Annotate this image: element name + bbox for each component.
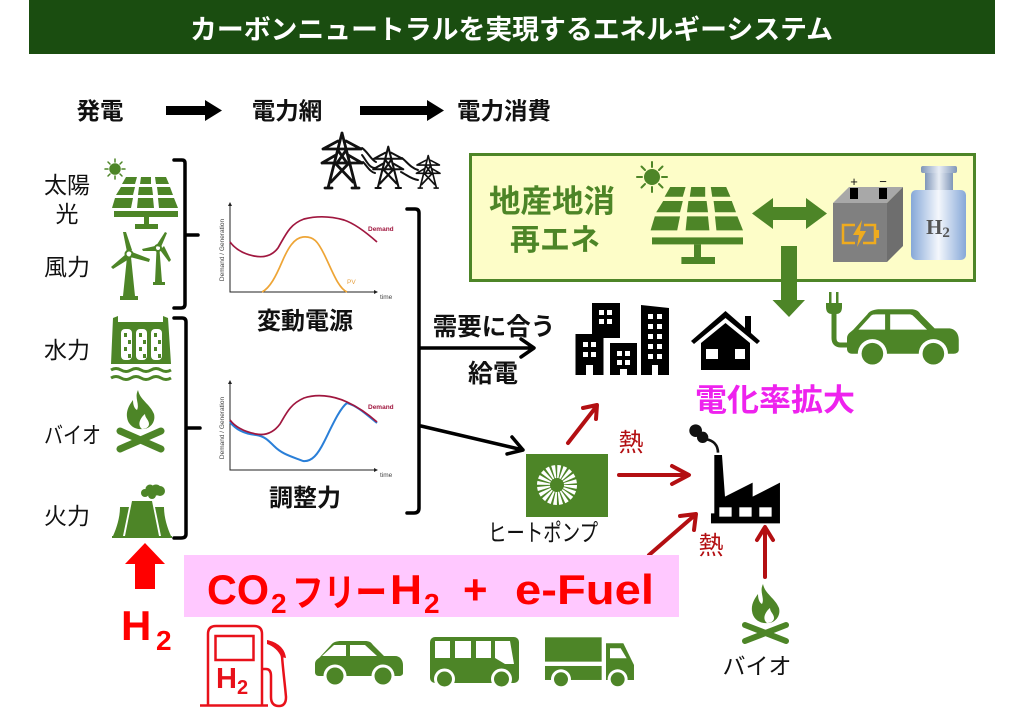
label: hydro: 水力 [44, 337, 90, 363]
label: hydrogen: 2 [156, 625, 172, 656]
chart: variable power [219, 202, 394, 301]
chart: balancing power: time [380, 472, 393, 479]
arrow: grid to consumption [360, 100, 444, 121]
icon: hydrogen tank: H [926, 215, 942, 239]
arrow: to heat pump [421, 426, 523, 454]
heading: local production: 地産地消 [489, 183, 615, 219]
banner: CO2-free hydrogen and e-fuel: 2 [271, 588, 287, 619]
label: solar second line: 光 [56, 201, 78, 227]
chart: variable power: Demand / Generation [219, 219, 226, 281]
icon: city buildings [576, 303, 669, 375]
icon: solar panel [651, 187, 743, 264]
title banner [29, 0, 995, 54]
arrow: bidirectional [752, 198, 827, 229]
icon: hydrogen fuel pump: 2 [237, 677, 248, 699]
banner: CO2-free hydrogen and e-fuel: + [463, 566, 488, 613]
heading: consumption: 電力消費 [457, 98, 551, 124]
icon: house [691, 311, 760, 370]
chart: variable power: time [380, 294, 393, 301]
arrow: biomass to factory [757, 527, 773, 577]
icon: fan [544, 472, 570, 498]
icon: bus [430, 637, 519, 690]
icon: solar panel [112, 177, 178, 229]
label: heat two: 熱 [698, 532, 724, 560]
heading: generation: 発電 [76, 98, 124, 124]
icon: transmission towers [322, 133, 440, 188]
banner: CO2-free hydrogen and e-fuel: フリー [292, 573, 387, 615]
heat pump [526, 454, 608, 517]
chart: balancing power [219, 380, 394, 479]
icon: biomass campfire [120, 390, 161, 449]
label: heat one: 熱 [618, 429, 644, 457]
icon: hydrogen tank [911, 166, 966, 260]
label: balancing power: 調整力 [269, 485, 341, 512]
icon: electric car with plug [826, 292, 959, 368]
label: hydrogen: H [121, 602, 151, 649]
chart: balancing power: Demand [368, 404, 394, 411]
label: solar: 太陽 [44, 172, 90, 198]
arrow: hydrogen up [125, 543, 165, 589]
icon: sun [637, 162, 667, 192]
label: thermal: 火力 [44, 503, 90, 529]
icon: thermal plant [112, 484, 172, 538]
bracket: dispatchable sources [174, 318, 200, 538]
line: PV [262, 237, 347, 292]
arrow: down to consumers [772, 246, 805, 317]
icon: hydro dam [111, 316, 171, 380]
label: heat pump: ヒートポンプ [488, 520, 598, 547]
arrow: fuel to factory [649, 514, 696, 555]
title banner: カーボンニュートラルを実現するエネルギーシステム [190, 15, 833, 45]
banner: CO2-free hydrogen and e-fuel [184, 555, 679, 619]
flow header: generation, grid, consumption [76, 98, 551, 124]
label: variable power: 変動電源 [257, 308, 353, 335]
banner: CO2-free hydrogen and e-fuel: H [390, 566, 422, 613]
bracket: combined supply [407, 209, 419, 513]
chart: variable power: PV [347, 279, 356, 286]
arrow: to buildings [420, 339, 534, 357]
icon: biomass campfire right [745, 584, 786, 641]
icon: hydrogen fuel pump: H [216, 663, 237, 695]
icon: wind turbines [111, 232, 171, 300]
icon: battery: − [879, 174, 887, 189]
icon: factory [689, 424, 780, 523]
banner: CO2-free hydrogen and e-fuel: CO [207, 566, 269, 613]
icon: battery [833, 174, 903, 262]
banner: CO2-free hydrogen and e-fuel: e-Fuel [515, 566, 654, 613]
icon: hydrogen tank: 2 [942, 225, 950, 241]
label: biomass right: バイオ [722, 653, 792, 679]
heading: grid: 電力網 [252, 98, 322, 124]
label: biomass: バイオ [44, 422, 101, 448]
line: demand [230, 396, 377, 435]
line: demand [230, 217, 377, 257]
label: wind: 風力 [44, 254, 90, 280]
label: hydrogen [121, 602, 172, 656]
arrow: generation to grid [166, 100, 222, 121]
icon: battery: + [850, 174, 858, 189]
arrow: heat pump to factory [619, 466, 689, 484]
chart: variable power: Demand [368, 226, 394, 233]
icon: hydrogen fuel pump [200, 626, 286, 706]
chart: balancing power: Demand / Generation [219, 397, 226, 459]
label: match demand: 需要に合う [433, 313, 555, 341]
label: supply: 給電 [468, 360, 518, 388]
line: adjustable supply [230, 403, 377, 461]
icon: truck [545, 637, 634, 689]
banner: CO2-free hydrogen and e-fuel: 2 [424, 588, 440, 619]
label: electrification: 電化率拡大 [695, 383, 855, 418]
heading: renewable: 再エネ [510, 224, 600, 257]
icon: car [315, 641, 403, 688]
icon: sun [105, 159, 125, 179]
panel: local renewable energy [470, 154, 974, 280]
bracket: variable sources [174, 160, 198, 308]
arrow: heat pump to buildings [568, 405, 597, 443]
